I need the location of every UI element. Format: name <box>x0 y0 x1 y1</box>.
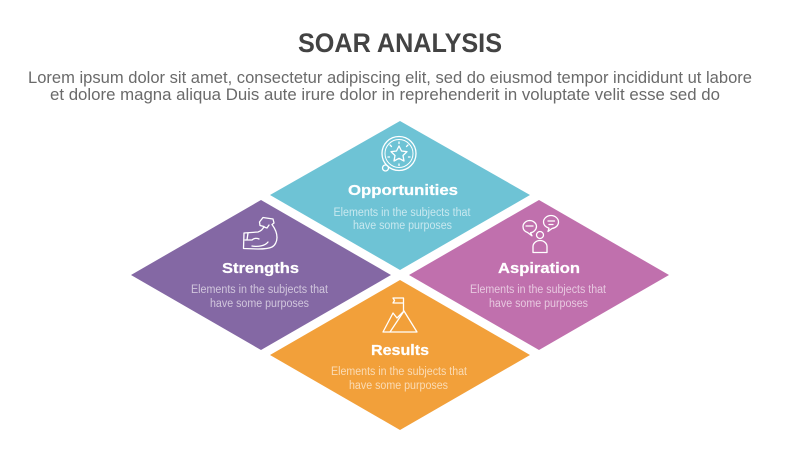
panel: strengths <box>131 200 391 350</box>
heading: aspiration: Aspiration <box>498 260 580 277</box>
heading: strengths: Strengths <box>222 260 299 277</box>
description: results: Elements in the subjects that <box>331 366 468 378</box>
intro text <box>28 69 752 104</box>
panel: opportunities <box>270 121 530 270</box>
description: opportunities <box>334 207 471 232</box>
description: strengths <box>191 284 329 310</box>
description: aspiration <box>470 284 607 310</box>
icon: mountain with flag <box>383 298 417 332</box>
heading: results: Results <box>371 342 429 359</box>
description: strengths: have some purposes <box>210 298 309 310</box>
description: opportunities: have some purposes <box>353 220 452 232</box>
icon: person with speech bubbles <box>523 216 558 252</box>
heading: opportunities: Opportunities <box>348 182 458 199</box>
description: strengths: Elements in the subjects that <box>191 284 329 296</box>
description: opportunities: Elements in the subjects that <box>334 207 471 219</box>
panel: results <box>270 280 530 430</box>
description: results <box>331 366 468 392</box>
description: aspiration: Elements in the subjects that <box>470 284 607 296</box>
description: results: have some purposes <box>349 380 448 392</box>
title: SOAR ANALYSIS <box>298 28 502 58</box>
intro text: et dolore magna aliqua Duis aute irure dolor in reprehenderit in voluptate velit esse sed do <box>50 86 720 104</box>
intro text: Lorem ipsum dolor sit amet, consectetur adipiscing elit, sed do eiusmod tempor incididunt ut labore <box>28 69 752 87</box>
icon: flexed arm <box>244 218 277 249</box>
panel: aspiration <box>409 200 669 350</box>
icon: magnifier with star <box>382 136 416 171</box>
description: aspiration: have some purposes <box>489 298 588 310</box>
